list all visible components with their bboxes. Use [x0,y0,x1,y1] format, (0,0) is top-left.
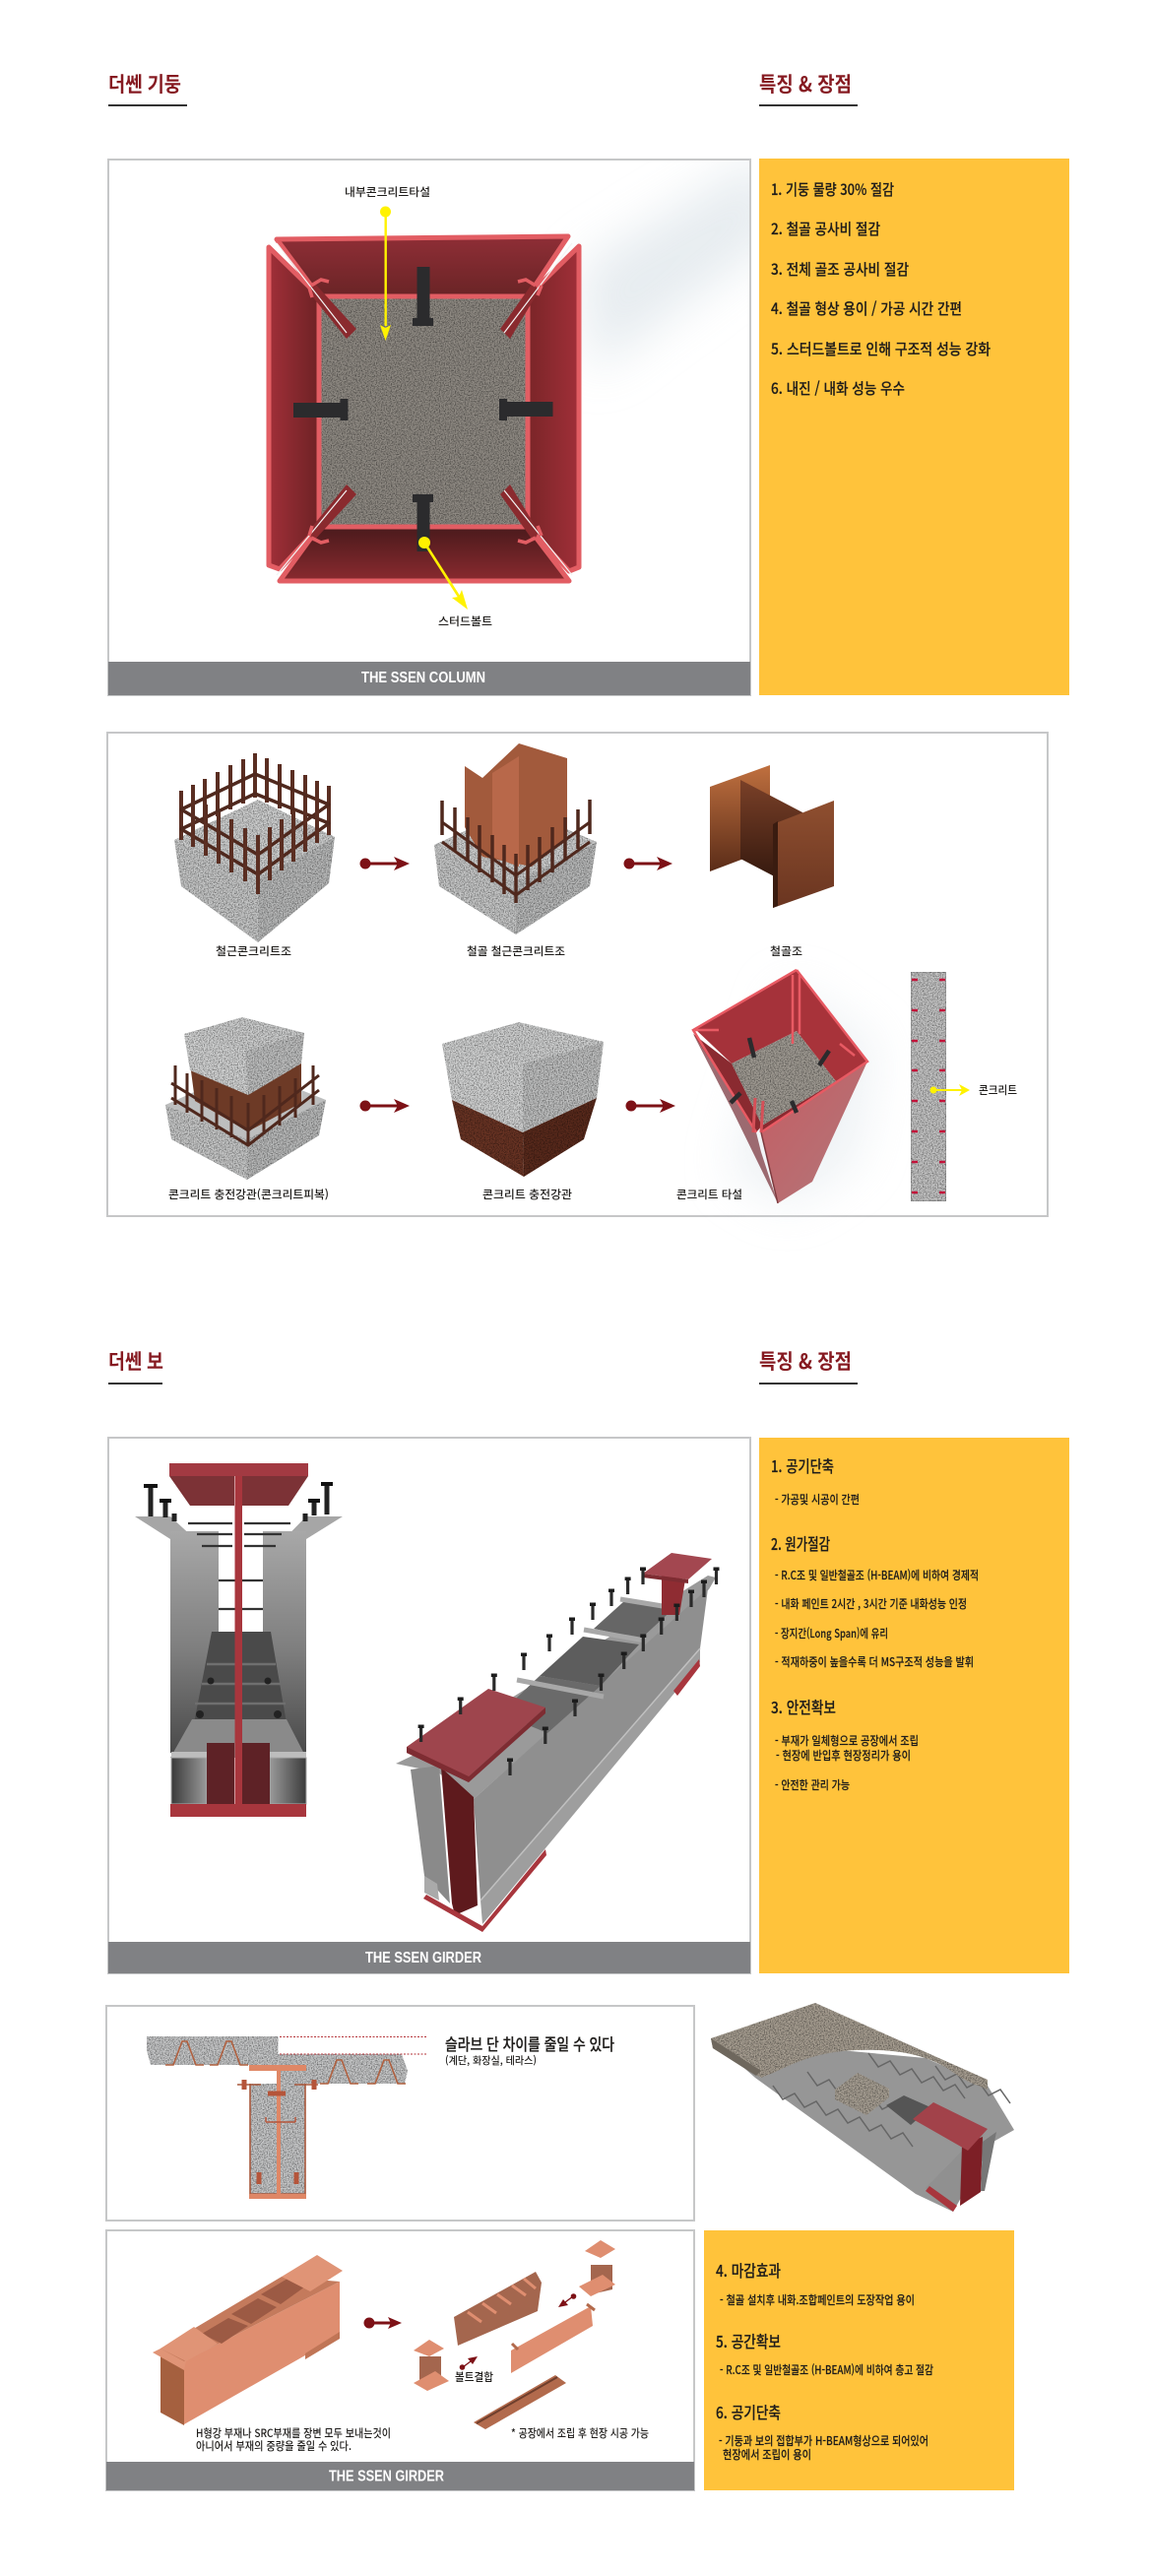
caption: weight note: 아니어서 부재의 중량을 줄일 수 있다. [196,2438,352,2454]
caption bar: THE SSEN GIRDER [329,2468,444,2485]
illustration: girder perspective view [396,1553,719,1932]
panel: additional girder features [704,2230,1014,2490]
text: slab headline: (계단, 화장실, 테라스) [445,2053,537,2068]
illustration: concrete strip section [911,972,946,1201]
arrow [626,1099,675,1113]
panel: girder features: 3. 안전확보 [771,1695,836,1718]
panel: assembly diagram [106,2230,694,2490]
panel: column features: 1. 기둥 물량 30% 절감 [771,178,894,200]
arrow [360,1099,410,1113]
label: bolt connection: 볼트결합 [455,2369,493,2385]
caption: weight note: H형강 부재나 SRC부재를 장변 모두 보내는것이 [196,2425,391,2441]
panel: girder features: - 현장에 반입후 현장정리가 용이 [776,1747,911,1764]
panel: girder features: 2. 원가절감 [771,1531,830,1555]
panel: additional girder features: - R.C조 및 일반철골조 (H-BEAM)에 비하여 층고 절감 [720,2361,933,2378]
panel: column features: 6. 내진 / 내화 성능 우수 [771,377,905,399]
illustration: concrete encased tube [165,1017,326,1180]
panel: girder features [759,1438,1069,1973]
panel: the ssen girder [108,1438,750,1973]
column top view illustration [269,236,579,581]
label: 콘크리트 충전강관 [482,1187,572,1202]
panel: girder features: - 부재가 일체형으로 공장에서 조립 [775,1732,919,1749]
illustration: assembled orange girder [153,2255,343,2425]
panel: slab difference diagram [106,2006,694,2221]
caption bar [108,662,750,695]
caption bar [108,1942,750,1973]
heading: 특징 & 장점 (column): 특징 & 장점 [759,69,852,98]
panel: additional girder features: - 철골 설치후 내화.조합페인트의 도장작업 용이 [720,2291,915,2308]
caption bar [106,2462,694,2490]
caption: weight note [196,2425,391,2454]
label: 콘크리트 타설 [676,1187,742,1202]
panel: girder features: - R.C조 및 일반철골조 (H-BEAM)에 비하여 경제적 [775,1567,979,1583]
panel: additional girder features: - 기둥과 보의 접합부가 H-BEAM형상으로 되어있어 [719,2432,928,2449]
panel: additional girder features: 현장에서 조립이 용이 [723,2446,811,2463]
panel: girder features: - 가공및 시공이 간편 [775,1491,860,1508]
illustration: slab section [147,2036,426,2199]
label: 철골 철근콘크리트조 [467,943,565,959]
illustration: exploded parts [414,2240,615,2429]
heading: 더쎈 보 [108,1346,163,1385]
caption bar: THE SSEN COLUMN [361,670,485,686]
callout: 콘크리트: 콘크리트 [979,1082,1017,1098]
heading: 더쎈 기둥: 더쎈 기둥 [108,69,181,98]
illustration: red column with concrete infill [693,970,876,1206]
label: 콘크리트 충전강관(콘크리트피복) [168,1187,329,1202]
panel: additional girder features: 4. 마감효과 [716,2258,781,2282]
panel: girder features: - 장지간(Long Span)에 유리 [775,1625,888,1642]
panel: girder features: - 적재하중이 높을수록 더 MS구조적 성능을 발휘 [775,1653,974,1670]
icon: stud bolts [293,267,553,551]
bolts [418,1568,719,1775]
heading: 더쎈 보: 더쎈 보 [108,1346,163,1376]
heading: 특징 & 장점 (girder): 특징 & 장점 [759,1346,852,1376]
panel: additional girder features: 6. 공기단축 [716,2400,781,2423]
callout: 콘크리트 [929,1082,1017,1098]
illustration: girder end view [135,1463,343,1817]
illustration: concrete filled tube [442,1022,604,1177]
panel: column features: 4. 철골 형상 용이 / 가공 시간 간편 [771,297,962,319]
label: 철근콘크리트조 [216,943,291,959]
text: slab headline: 슬라브 단 차이를 줄일 수 있다 [445,2031,614,2055]
label: bolt connection [455,2293,576,2385]
text: slab headline [445,2031,614,2068]
illustration: steel H column [710,765,834,908]
label: 철골조 [770,943,802,959]
panel: column type comparison [107,733,1048,1216]
callout: 스터드볼트 [418,537,492,629]
arrow [364,2317,402,2329]
arrow [360,857,410,870]
callout: 스터드볼트: 스터드볼트 [438,613,492,629]
callout: 내부콘크리트타설 [345,184,430,341]
panel: girder features: - 내화 페인트 2시간 , 3시간 기준 내화성능 인정 [775,1595,967,1612]
panel: column features: 3. 전체 골조 공사비 절감 [771,258,909,280]
panel: additional girder features: 5. 공간확보 [716,2329,781,2352]
panel: column features: 5. 스터드볼트로 인해 구조적 성능 강화 [771,338,991,359]
panel: column features [759,159,1069,695]
panel: column features: 2. 철골 공사비 절감 [771,218,880,239]
panel: girder features: - 안전한 관리 가능 [775,1776,850,1793]
panel: the ssen column [108,158,778,695]
caption bar: THE SSEN GIRDER [365,1950,481,1966]
caption: factory assembly note: * 공장에서 조립 후 현장 시공 가능 [511,2425,649,2441]
arrow [624,857,672,870]
illustration: deck and slab perspective [711,2003,1014,2212]
illustration: steel reinforced concrete [434,743,597,934]
callout: 내부콘크리트타설: 내부콘크리트타설 [345,184,430,200]
illustration: reinforced concrete [174,753,335,942]
panel: girder features: 1. 공기단축 [771,1453,834,1477]
